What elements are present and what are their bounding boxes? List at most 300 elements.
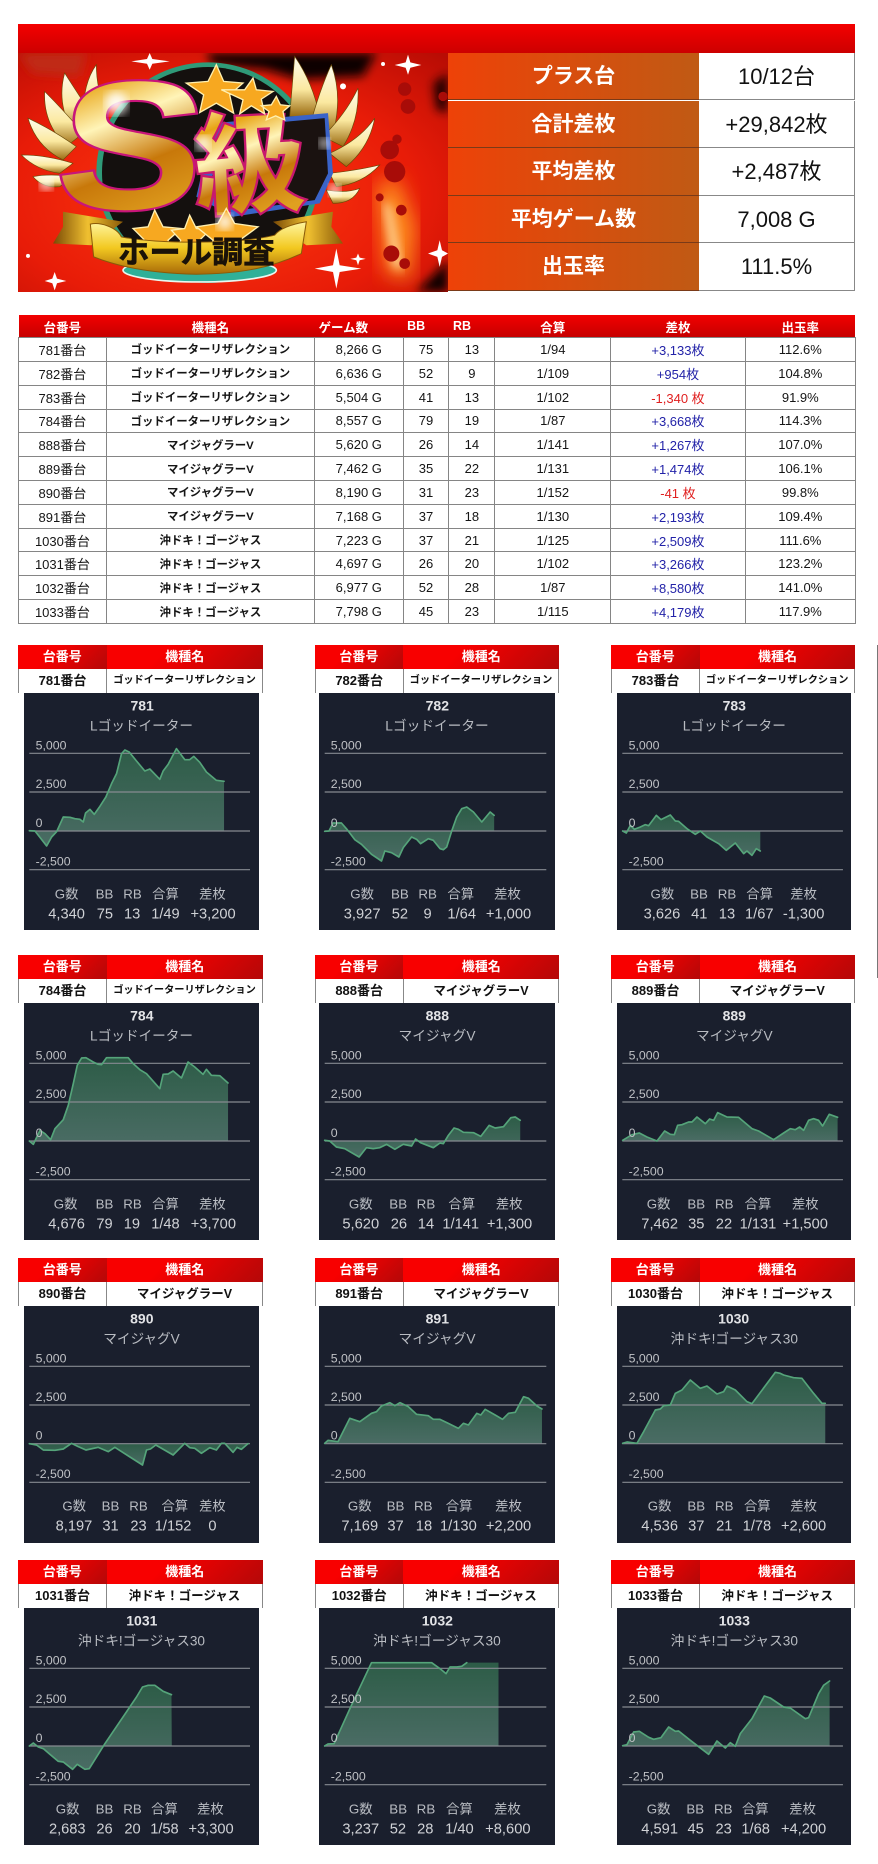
chart: 782: 0 — [331, 816, 338, 830]
chart: 889: 5,000 — [628, 1048, 659, 1062]
chart: 781: -2,500 — [36, 854, 71, 868]
table header: 5,504 G — [336, 390, 382, 405]
chart: 891: 0 — [331, 1429, 338, 1443]
table header: +1,474枚 — [651, 462, 704, 477]
chart: 782: 52 — [392, 906, 408, 922]
table header: 出玉率 — [782, 321, 819, 335]
panel: 888: 888番台 — [335, 983, 383, 998]
table header: +4,179枚 — [651, 605, 704, 620]
table header: 91.9% — [782, 390, 819, 405]
chart: 1033: RB — [714, 1801, 732, 1816]
chart: 1030: 5,000 — [628, 1352, 659, 1366]
panel: 1033 — [611, 1560, 855, 1845]
chart: 783 — [617, 693, 851, 930]
chart: 1031: -2,500 — [36, 1769, 71, 1783]
table header: 沖ドキ！ゴージャス — [160, 535, 261, 547]
chart: 1030: 沖ドキ!ゴージャス30 — [670, 1331, 798, 1347]
chart: 782: -2,500 — [331, 854, 366, 868]
table header: 沖ドキ！ゴージャス — [160, 559, 261, 571]
chart: 889: 2,500 — [628, 1087, 659, 1101]
chart: 1031: 20 — [124, 1821, 141, 1837]
chart: 890: 0 — [36, 1429, 43, 1443]
chart: 784: Lゴッドイーター — [90, 1027, 193, 1043]
chart: 888: 5,000 — [331, 1048, 362, 1062]
chart: 1033: 0 — [628, 1731, 635, 1745]
panel: 891: マイジャグラーV — [433, 1287, 529, 1301]
chart: 782: 1/64 — [448, 906, 476, 922]
table header: +3,668枚 — [651, 414, 704, 429]
chart: 1032 — [319, 1608, 555, 1845]
chart: 784: 4,676 — [48, 1216, 85, 1232]
chart: 889: マイジャグV — [696, 1028, 773, 1043]
chart: 784: 合算 — [152, 1196, 179, 1211]
stat: プラス台 — [448, 53, 855, 100]
chart: 1031: 2,683 — [49, 1821, 86, 1837]
panel: 1031 — [18, 1560, 263, 1845]
table header: +3,266枚 — [651, 557, 704, 572]
table header: 沖ドキ！ゴージャス — [160, 583, 261, 595]
table header — [19, 315, 855, 620]
chart: 782: 9 — [424, 906, 432, 922]
chart: 890: G数 — [62, 1499, 86, 1514]
table header: 52 — [419, 580, 433, 595]
table header: 19 — [465, 413, 479, 428]
chart: 891: BB — [387, 1499, 405, 1514]
panel: 782: ゴッドイーターリザレクション — [410, 675, 552, 686]
chart: 783: -1,300 — [783, 906, 824, 922]
table header: 31 — [419, 485, 433, 500]
table header: 891番台 — [39, 510, 86, 525]
chart: 888: -2,500 — [331, 1164, 366, 1178]
chart: 781: Lゴッドイーター — [90, 717, 193, 733]
table header: 台番号 — [44, 321, 81, 335]
chart: 1032: 2,500 — [331, 1692, 362, 1706]
table header: 7,798 G — [336, 604, 382, 619]
chart: 1031: 沖ドキ!ゴージャス30 — [78, 1632, 205, 1648]
table header: 14 — [465, 437, 479, 452]
panel: 784 — [18, 955, 263, 1240]
chart: 888: G数 — [349, 1196, 373, 1211]
data table: machines — [18, 315, 856, 624]
panel: 888 — [315, 955, 559, 1240]
chart: 1032: 0 — [331, 1731, 338, 1745]
chart: 1032: 28 — [417, 1821, 434, 1837]
chart: 890: BB — [102, 1499, 120, 1514]
table header: 1/152 — [537, 485, 569, 500]
chart: 782: G数 — [351, 886, 374, 901]
chart: 890: -2,500 — [36, 1467, 71, 1481]
panel: 888: マイジャグラーV — [433, 984, 529, 998]
chart: 1033: 1/68 — [741, 1821, 770, 1837]
panel: 784: 機種名 — [165, 959, 204, 974]
chart: 782 — [319, 693, 555, 930]
chart: 889: 889 — [722, 1008, 746, 1024]
chart: 1032: G数 — [349, 1801, 373, 1816]
table header: 8,266 G — [336, 342, 382, 357]
stat: 平均差枚: +2,487枚 — [732, 159, 821, 184]
chart: 782: +1,000 — [486, 906, 531, 922]
chart: 784: RB — [123, 1196, 142, 1211]
chart: 784: 0 — [36, 1126, 43, 1140]
panel: 781: 台番号 — [43, 649, 82, 664]
table header: 21 — [465, 533, 479, 548]
table header: 37 — [419, 509, 433, 524]
chart: 781: 75 — [97, 906, 113, 922]
panel: 1030: 沖ドキ！ゴージャス — [721, 1287, 833, 1301]
chart: 1031: 26 — [96, 1821, 113, 1837]
stat: 出玉率: 111.5% — [741, 254, 812, 279]
panel: 1032 — [315, 1560, 559, 1845]
chart: 1032: RB — [417, 1801, 436, 1816]
chart: 891: -2,500 — [331, 1467, 366, 1481]
panel: 1031: 機種名 — [165, 1564, 204, 1579]
chart: 889: 22 — [715, 1216, 732, 1232]
chart: 891: 1/130 — [440, 1519, 477, 1535]
table header: 1/94 — [540, 342, 565, 357]
table header: 890番台 — [39, 486, 86, 501]
panel: 782 — [315, 645, 559, 930]
panel: 782: 782番台 — [335, 673, 383, 688]
panel: 1031: 1031番台 — [35, 1588, 90, 1603]
table header: 機種名 — [192, 321, 229, 335]
chart: 1033: BB — [686, 1801, 704, 1816]
chart: 1033: -2,500 — [628, 1769, 663, 1783]
panel: 781 — [18, 645, 263, 930]
chart: 1030: 4,536 — [641, 1519, 678, 1535]
panel: 889: 台番号 — [636, 959, 675, 974]
chart: 891: マイジャグV — [399, 1332, 477, 1347]
chart: 1031: 2,500 — [36, 1692, 67, 1706]
table header: 1032番台 — [35, 581, 90, 596]
table header: 1/130 — [537, 509, 569, 524]
table header: 1/131 — [537, 461, 569, 476]
chart: 783: 合算 — [746, 886, 773, 901]
chart: 890: 差枚 — [199, 1499, 226, 1514]
table header: 141.0% — [778, 580, 822, 595]
chart: 1031 — [24, 1608, 259, 1845]
stat: 合計差枚: +29,842枚 — [725, 112, 828, 137]
table header: ゲーム数 — [318, 321, 368, 335]
panel: 781: 781番台 — [39, 673, 86, 688]
chart: 1031: 0 — [36, 1731, 43, 1745]
chart: 888: 差枚 — [496, 1196, 523, 1211]
table header: 20 — [465, 556, 479, 571]
chart: 782: 5,000 — [331, 738, 362, 752]
chart: 784: 2,500 — [36, 1087, 67, 1101]
chart: 783: Lゴッドイーター — [682, 717, 786, 733]
table header: 4,697 G — [336, 556, 382, 571]
panel: 1032: 台番号 — [339, 1564, 378, 1579]
panel: 782: 機種名 — [462, 649, 501, 664]
chart: 1033: +4,200 — [781, 1821, 826, 1837]
chart: 781: 2,500 — [36, 777, 67, 791]
banner: S級ホール調査 emblem: ホール調査 — [118, 235, 275, 270]
table header: RB — [453, 319, 471, 333]
chart: 1032: 1/40 — [445, 1821, 474, 1837]
chart: 1033: 5,000 — [628, 1653, 659, 1667]
stat: 出玉率 — [448, 243, 855, 291]
chart: 890: マイジャグV — [103, 1332, 181, 1347]
chart: 1033: G数 — [646, 1801, 670, 1816]
chart: 1033 — [617, 1608, 851, 1845]
chart: 1032: 5,000 — [331, 1653, 362, 1667]
chart: 1032: 1032 — [422, 1613, 453, 1629]
chart: 888: 1/141 — [443, 1216, 479, 1232]
chart: 783: RB — [717, 886, 736, 901]
chart: 1031: 1/58 — [150, 1821, 179, 1837]
chart: 1033: 差枚 — [789, 1801, 816, 1816]
chart: 781 — [24, 693, 259, 930]
table header: 99.8% — [782, 485, 819, 500]
chart: 784: 79 — [96, 1216, 113, 1232]
table header: 8,190 G — [336, 485, 382, 500]
chart: 889: 7,462 — [641, 1216, 678, 1232]
chart: 781: BB — [96, 886, 114, 901]
table header: +3,133枚 — [651, 343, 704, 358]
chart: 1030: 2,500 — [628, 1390, 659, 1404]
chart: 888: 合算 — [449, 1196, 475, 1211]
chart: 1030: 37 — [688, 1519, 704, 1535]
chart: 888 — [319, 1003, 555, 1240]
title bar — [18, 24, 855, 53]
table header: 1/141 — [537, 437, 569, 452]
table header: +2,193枚 — [651, 510, 704, 525]
table header: 104.8% — [778, 366, 822, 381]
chart: 1033: 沖ドキ!ゴージャス30 — [670, 1632, 798, 1648]
chart: 782: BB — [391, 886, 409, 901]
chart: 1030: 0 — [628, 1429, 635, 1443]
chart: 889: 0 — [628, 1126, 635, 1140]
stat: 出玉率: 出玉率 — [542, 255, 605, 278]
chart: 1033: 2,500 — [628, 1692, 659, 1706]
chart: 1032: 沖ドキ!ゴージャス30 — [373, 1632, 501, 1648]
chart: 1031: RB — [123, 1801, 142, 1816]
chart: 781: 0 — [36, 816, 43, 830]
chart: 783: 2,500 — [628, 777, 659, 791]
table header: 沖ドキ！ゴージャス — [160, 607, 261, 619]
chart: 890: 890 — [130, 1311, 154, 1327]
chart: 889: 差枚 — [792, 1196, 818, 1211]
panel: 1031: 台番号 — [43, 1564, 82, 1579]
table header: 1/115 — [537, 604, 569, 619]
chart: 1032: 3,237 — [343, 1821, 379, 1837]
table header: 1030番台 — [35, 534, 90, 549]
chart: 888: RB — [417, 1196, 436, 1211]
chart: 1030: G数 — [647, 1499, 671, 1514]
chart: 891: G数 — [348, 1499, 372, 1514]
panel: 1030: 1030番台 — [628, 1286, 683, 1301]
table header: 79 — [419, 413, 433, 428]
chart: 1031: 5,000 — [36, 1653, 67, 1667]
panel: 1030: 機種名 — [758, 1262, 797, 1277]
table header: 23 — [465, 604, 479, 619]
panel: 784: 台番号 — [43, 959, 82, 974]
stat: 合計差枚: 合計差枚 — [532, 113, 616, 136]
table header: 112.6% — [779, 342, 822, 357]
chart: 782: 差枚 — [494, 886, 521, 901]
chart: 783: 0 — [628, 816, 635, 830]
chart: 891: 合算 — [446, 1499, 473, 1514]
table header: 52 — [419, 366, 433, 381]
chart: 1030: 1030 — [718, 1311, 749, 1327]
chart: 891: 差枚 — [495, 1499, 522, 1514]
panel: 783: 783番台 — [632, 673, 679, 688]
chart: 781: G数 — [55, 886, 78, 901]
table header: 117.9% — [779, 604, 822, 619]
chart: 782: RB — [419, 886, 437, 901]
table header: BB — [407, 319, 425, 333]
table header: 45 — [419, 604, 433, 619]
table header: 1033番台 — [35, 605, 90, 620]
chart: 781: 合算 — [152, 886, 179, 901]
table header: 782番台 — [39, 367, 86, 382]
table header: 合算 — [540, 321, 565, 335]
chart: 1030: 差枚 — [790, 1499, 817, 1514]
panel: 783: 機種名 — [758, 649, 797, 664]
table header: 1/87 — [540, 580, 565, 595]
chart: 891: 891 — [426, 1311, 450, 1327]
chart: 891: 37 — [388, 1519, 404, 1535]
chart: 889: 35 — [688, 1216, 704, 1232]
chart: 783: 差枚 — [790, 886, 817, 901]
table header: 13 — [465, 390, 479, 405]
chart: 891: 5,000 — [331, 1352, 362, 1366]
chart: 888: 14 — [418, 1216, 434, 1232]
panel: 889: マイジャグラーV — [730, 984, 825, 998]
chart: 783: 783 — [722, 698, 746, 714]
table header: 783番台 — [39, 391, 86, 406]
chart: 783: G数 — [650, 886, 674, 901]
panel: 782: 台番号 — [339, 649, 378, 664]
table header: 28 — [465, 580, 479, 595]
table header: +8,580枚 — [651, 581, 704, 596]
chart: 782: 3,927 — [344, 906, 381, 922]
panel: 891 — [315, 1258, 559, 1543]
chart: 782: Lゴッドイーター — [386, 717, 489, 733]
chart: 888: 0 — [331, 1126, 338, 1140]
table header: 784番台 — [39, 414, 86, 429]
stat: 平均ゲーム数: 7,008 G — [737, 207, 816, 232]
panel: 784: ゴッドイーターリザレクション — [113, 985, 256, 996]
table header: ゴッドイーターリザレクション — [131, 344, 290, 356]
chart: 1030: +2,600 — [781, 1519, 826, 1535]
chart: 891 — [319, 1306, 555, 1543]
chart: 781: 1/49 — [151, 906, 180, 922]
panel: 890 — [18, 1258, 263, 1543]
chart: 782: 合算 — [448, 886, 474, 901]
panel: 888: 台番号 — [339, 959, 378, 974]
chart: 889: -2,500 — [628, 1164, 663, 1178]
chart: 888: +1,300 — [487, 1216, 532, 1232]
panel: 888: 機種名 — [462, 959, 501, 974]
ribbon — [53, 212, 123, 245]
chart: 783: 3,626 — [643, 906, 680, 922]
chart: 1032: +8,600 — [485, 1821, 531, 1837]
table header: 26 — [419, 556, 433, 571]
chart: 784: 19 — [124, 1216, 140, 1232]
table header: 37 — [419, 533, 433, 548]
chart: 889: RB — [715, 1196, 733, 1211]
chart: 1031: +3,300 — [188, 1821, 234, 1837]
chart: 890: 8,197 — [56, 1519, 92, 1535]
chart: 783: 1/67 — [745, 906, 773, 922]
table header: 107.0% — [778, 437, 822, 452]
chart: 890: 0 — [208, 1519, 216, 1535]
chart: 784: BB — [96, 1196, 114, 1211]
chart: 888: マイジャグV — [399, 1028, 477, 1043]
table header: ゴッドイーターリザレクション — [131, 392, 290, 404]
chart: 784: 784 — [130, 1008, 154, 1024]
table header: マイジャグラーV — [167, 487, 254, 499]
chart: 783: 13 — [718, 906, 735, 922]
chart: 1030: BB — [687, 1499, 705, 1514]
panel: 783 — [611, 645, 855, 930]
chart: 782: 2,500 — [331, 777, 362, 791]
stat: 平均ゲーム数: 平均ゲーム数 — [511, 208, 636, 231]
table header: 1/87 — [540, 413, 565, 428]
chart: 889 — [617, 1003, 851, 1240]
table header: +2,509枚 — [651, 534, 704, 549]
chart: 1032: 合算 — [446, 1801, 473, 1816]
table header: 22 — [465, 461, 479, 476]
panel: 890: マイジャグラーV — [137, 1287, 232, 1301]
chart: 891: 18 — [416, 1519, 432, 1535]
summary stats panel — [448, 53, 855, 291]
chart: 784: 差枚 — [199, 1196, 226, 1211]
table header: 781番台 — [39, 343, 86, 358]
panel: 1032: 1032番台 — [332, 1588, 387, 1603]
chart: 1033: 4,591 — [641, 1821, 678, 1837]
chart: 784: -2,500 — [36, 1164, 71, 1178]
table header: 1/102 — [537, 556, 569, 571]
panel: 783: ゴッドイーターリザレクション — [706, 675, 848, 686]
chart: 1033: 45 — [687, 1821, 703, 1837]
chart: 890: 1/152 — [155, 1519, 191, 1535]
panel: 891: 891番台 — [335, 1286, 383, 1301]
chart: 891: 2,500 — [331, 1390, 362, 1404]
chart: 783: -2,500 — [628, 854, 663, 868]
panel: 1032: 沖ドキ！ゴージャス — [425, 1589, 537, 1603]
table header: マイジャグラーV — [167, 440, 254, 452]
table header: 18 — [465, 509, 479, 524]
panel: 891: 機種名 — [462, 1262, 501, 1277]
table header: 888番台 — [39, 438, 86, 453]
chart: 888: BB — [390, 1196, 408, 1211]
chart: 1032: -2,500 — [331, 1769, 366, 1783]
panel: 889: 機種名 — [758, 959, 797, 974]
table header: 6,977 G — [336, 580, 382, 595]
chart: 1032: 差枚 — [494, 1801, 521, 1816]
stat: 合計差枚 — [448, 101, 855, 148]
chart: 888: 2,500 — [331, 1087, 362, 1101]
chart: 890: 31 — [102, 1519, 119, 1535]
chart: 890: 5,000 — [36, 1352, 67, 1366]
table header: ゴッドイーターリザレクション — [131, 416, 290, 428]
table header: 1/109 — [537, 366, 569, 381]
chart: 784: +3,700 — [191, 1216, 236, 1232]
chart: 890 — [24, 1306, 259, 1543]
chart: 781: 781 — [131, 698, 154, 714]
chart: 891: 7,169 — [342, 1519, 378, 1535]
table header: +954枚 — [657, 367, 699, 382]
chart: 783: 41 — [691, 906, 707, 922]
chart: 1030: -2,500 — [628, 1467, 663, 1481]
panel: 890: 890番台 — [39, 1286, 86, 1301]
table header: +1,267枚 — [651, 438, 704, 453]
stat: 平均差枚 — [448, 148, 855, 196]
chart: 781: RB — [123, 886, 142, 901]
table header: 13 — [465, 342, 479, 357]
